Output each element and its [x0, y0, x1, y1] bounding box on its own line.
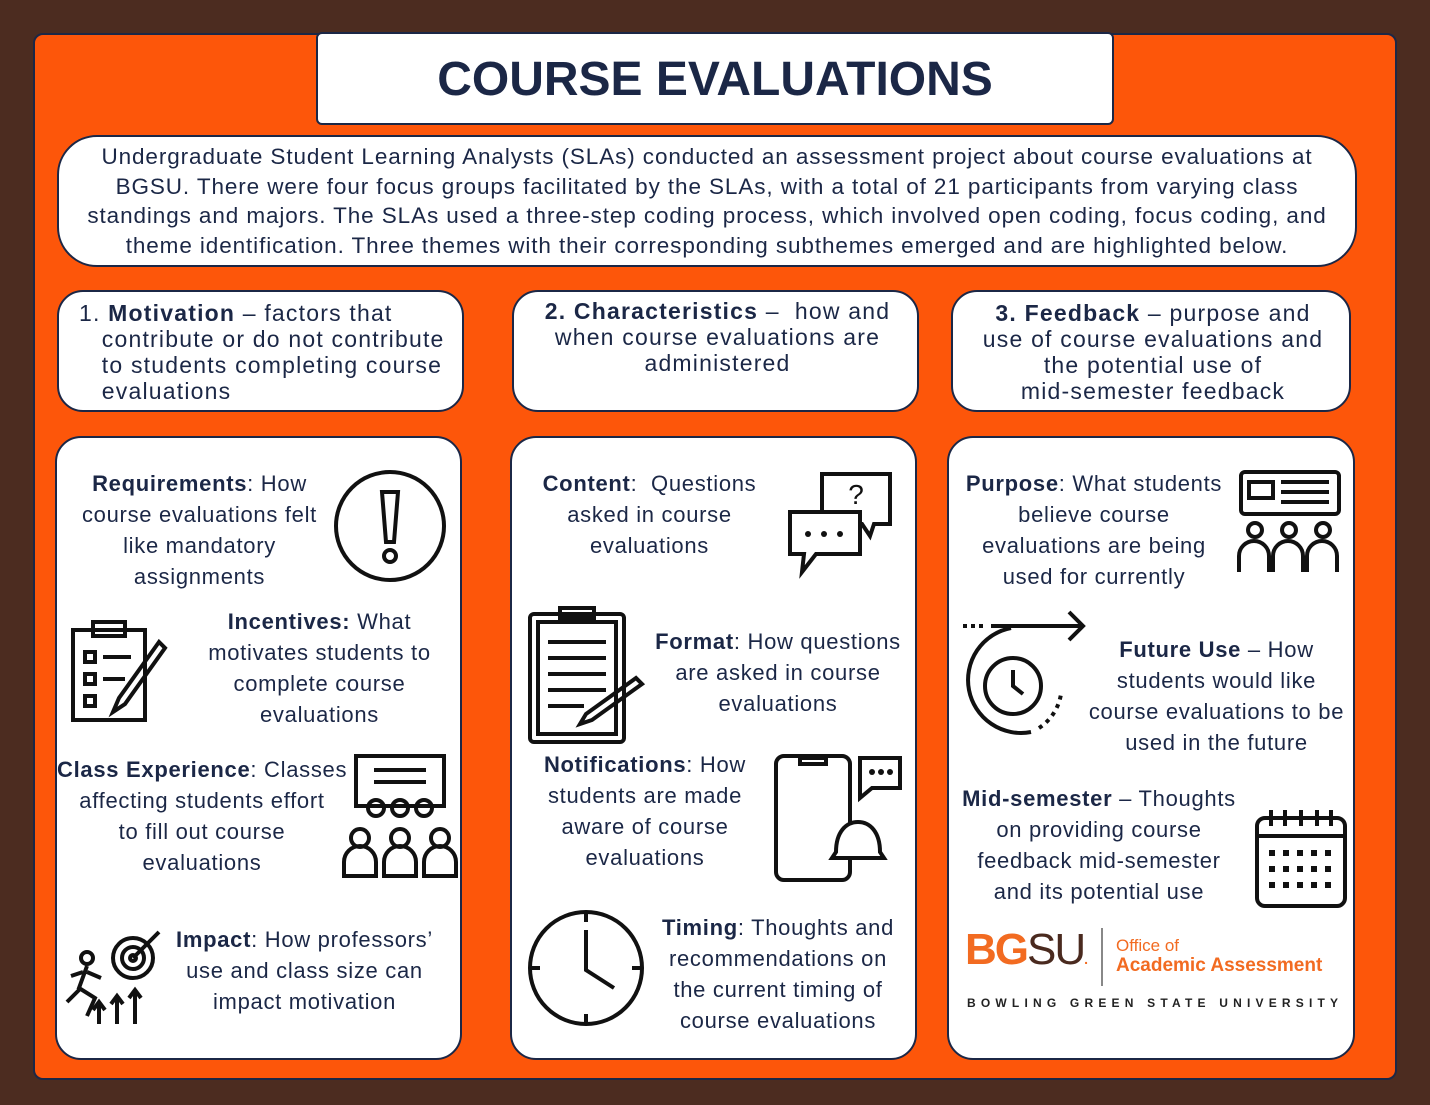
Class Experience [57, 757, 347, 875]
Future Use [1089, 637, 1344, 755]
Content [543, 471, 756, 558]
theme 2: when course evaluations are [555, 324, 880, 350]
icon: clipboard pen [528, 606, 645, 744]
icon: clock [528, 910, 644, 1026]
panel: characteristics [510, 436, 917, 1060]
logo: BGSU: Academic Assessment [1116, 955, 1322, 976]
Incentives: evaluations [260, 702, 379, 727]
panel: feedback [947, 436, 1355, 1060]
Class Experience: affecting students effort [79, 788, 325, 813]
Format: evaluations [718, 691, 838, 716]
theme 3 [951, 290, 1351, 412]
Requirements: Requirements: How [92, 471, 307, 496]
title [316, 32, 1114, 125]
intro text: standings and majors. The SLAs used a three-step coding process, which involved open coding, focus coding, and [87, 203, 1327, 228]
Timing: the current timing of [673, 977, 883, 1002]
Future Use: students would like [1117, 668, 1316, 693]
icon: chat bubbles: ? [848, 479, 864, 510]
Notifications: evaluations [586, 845, 704, 870]
icon: calendar [1255, 810, 1347, 908]
theme 3: 3. Feedback – purpose and [995, 300, 1311, 326]
Class Experience: Class Experience: Classes [57, 757, 347, 782]
theme 2: administered [644, 350, 791, 376]
Purpose: Purpose: What students [966, 471, 1222, 496]
Mid-semester: and its potential use [994, 879, 1204, 904]
intro text: theme identification. Three themes with their corresponding subthemes emerged and are highlighted below. [126, 232, 1288, 258]
Mid-semester [962, 786, 1236, 904]
Mid-semester: Mid-semester – Thoughts [962, 786, 1236, 811]
Timing [662, 915, 894, 1033]
Timing: Timing: Thoughts and [662, 915, 894, 940]
Future Use: Future Use – How [1119, 637, 1314, 662]
Format: are asked in course [675, 660, 881, 685]
icon: classroom [342, 754, 458, 878]
Notifications: Notifications: How [544, 752, 746, 777]
Purpose: evaluations are being [982, 533, 1206, 558]
Incentives: Incentives: What [228, 609, 411, 634]
icon: clipboard [71, 620, 168, 722]
theme 1: contribute or do not contribute [102, 326, 445, 352]
Timing: recommendations on [669, 946, 887, 971]
theme 1: to students completing course [102, 352, 442, 378]
Mid-semester: on providing course [996, 817, 1202, 842]
logo: BGSU [965, 925, 1343, 1010]
theme 1: 1. Motivation – factors that [79, 300, 393, 326]
Requirements [82, 471, 317, 589]
Future Use: course evaluations to be [1089, 699, 1344, 724]
Impact: Impact: How professors’ [176, 927, 433, 952]
Impact: impact motivation [213, 989, 396, 1014]
Format: Format: How questions [655, 629, 901, 654]
Purpose: believe course [1018, 502, 1170, 527]
Mid-semester: feedback mid-semester [977, 848, 1221, 873]
icon: clock arrow [963, 610, 1086, 735]
Requirements: assignments [134, 564, 265, 589]
theme 2: 2. Characteristics – how and [545, 298, 890, 324]
intro text [57, 135, 1357, 267]
theme 3: the potential use of [1044, 352, 1262, 378]
Future Use: used in the future [1125, 730, 1308, 755]
Requirements: like mandatory [123, 533, 276, 558]
Format [655, 629, 901, 716]
Content: asked in course [567, 502, 732, 527]
Class Experience: to fill out course [119, 819, 285, 844]
Notifications: aware of course [561, 814, 729, 839]
Purpose: used for currently [1003, 564, 1185, 589]
title: COURSE EVALUATIONS [437, 53, 993, 106]
theme 3: use of course evaluations and [983, 326, 1323, 352]
icon: presentation [1237, 470, 1341, 572]
panel: motivation [55, 436, 462, 1060]
icon: phone [774, 754, 902, 882]
icon: exclamation [334, 470, 446, 582]
Purpose [966, 471, 1222, 589]
logo: BGSU: Office of [1116, 936, 1179, 955]
Requirements: course evaluations felt [82, 502, 317, 527]
icon: runner target [66, 930, 160, 1024]
Class Experience: evaluations [142, 850, 262, 875]
Incentives: complete course [234, 671, 405, 696]
logo: BGSU: BGSU. [965, 925, 1086, 974]
theme 2 [512, 290, 919, 412]
Notifications [544, 752, 746, 870]
Content: Content: Questions [543, 471, 756, 496]
Incentives: motivates students to [208, 640, 431, 665]
Notifications: students are made [548, 783, 742, 808]
Incentives [208, 609, 431, 727]
Impact [176, 927, 433, 1014]
icon: chat bubbles [788, 472, 892, 579]
Content: evaluations [590, 533, 709, 558]
theme 1: evaluations [102, 378, 231, 404]
theme 3: mid-semester feedback [1021, 378, 1285, 404]
intro text: Undergraduate Student Learning Analysts (SLAs) conducted an assessment project about course evaluations at [101, 144, 1313, 169]
intro text: BGSU. There were four focus groups facilitated by the SLAs, with a total of 21 participants from varying class [116, 174, 1298, 198]
Impact: use and class size can [186, 958, 423, 983]
Timing: course evaluations [680, 1008, 876, 1033]
theme 1 [57, 290, 464, 412]
logo: BGSU: BOWLING GREEN STATE UNIVERSITY [967, 996, 1343, 1010]
